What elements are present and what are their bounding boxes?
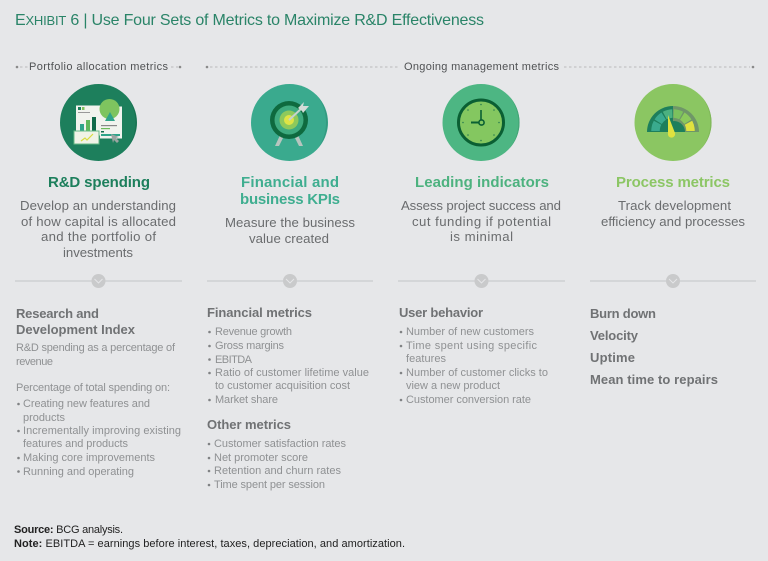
metrics: research and development index: revenue xyxy=(16,356,53,368)
description: R&D spending: investments xyxy=(63,245,133,260)
metrics: financial metrics: Gross margins xyxy=(215,340,284,352)
description: process metrics: efficiency and processes xyxy=(601,214,745,229)
metrics: user behavior xyxy=(399,305,548,406)
metrics: research and development index: Running and operating xyxy=(23,466,134,478)
metrics: other metrics xyxy=(207,417,346,491)
metrics: research and development index: products xyxy=(23,412,66,424)
column heading: R&D spending: R&D spending xyxy=(48,174,150,191)
metrics: user behavior: Customer conversion rate xyxy=(406,394,531,406)
metrics: financial metrics: to customer acquisition cost xyxy=(215,380,350,392)
icon: clock xyxy=(442,84,520,161)
section label: ongoing management metrics: Ongoing management metrics xyxy=(404,61,560,73)
metrics: process metrics list xyxy=(590,306,718,387)
column heading: financial and business KPIs: business KPIs xyxy=(240,191,340,208)
description: leading indicators: cut funding if potential xyxy=(412,214,551,229)
metrics: research and development index: Making core improvements xyxy=(23,452,156,464)
metrics: process metrics list: Uptime xyxy=(590,350,635,365)
metrics: other metrics: Other metrics xyxy=(207,417,291,432)
metrics: user behavior: view a new product xyxy=(406,380,500,392)
column heading: financial and business KPIs xyxy=(240,174,340,208)
metrics: financial metrics: Ratio of customer lifetime value xyxy=(215,367,369,379)
metrics: financial metrics xyxy=(207,305,369,406)
metrics: user behavior: Number of customer clicks to xyxy=(406,367,548,379)
source and note: Note: EBITDA = earnings before interest, taxes, depreciation, and amortization. xyxy=(14,538,405,550)
description: leading indicators: Assess project success and xyxy=(401,198,561,213)
title: EXHIBIT 6 | Use Four Sets of Metrics to Maximize R&D Effectiveness xyxy=(15,12,484,29)
description: process metrics: Track development xyxy=(618,198,731,213)
column heading: financial and business KPIs: Financial and xyxy=(241,174,339,191)
column heading: leading indicators: Leading indicators xyxy=(415,174,549,191)
metrics: financial metrics: Market share xyxy=(215,394,278,406)
description: R&D spending: of how capital is allocated xyxy=(21,214,176,229)
source and note: Source: BCG analysis. xyxy=(14,524,123,536)
metrics: user behavior: Time spent using specific xyxy=(406,340,538,352)
icon: target with arrow xyxy=(251,84,328,161)
source and note xyxy=(14,524,405,550)
divider with chevron: column 2 xyxy=(207,274,373,288)
description: leading indicators xyxy=(401,198,561,244)
metrics: other metrics: Net promoter score xyxy=(214,452,308,464)
metrics: process metrics list: Mean time to repairs xyxy=(590,372,718,387)
description: R&D spending: Develop an understanding xyxy=(20,198,176,213)
divider with chevron: column 1 xyxy=(15,274,182,288)
metrics: financial metrics: Financial metrics xyxy=(207,305,312,320)
section label: portfolio allocation metrics: Portfolio allocation metrics xyxy=(29,61,168,73)
metrics: user behavior: Number of new customers xyxy=(406,326,534,338)
metrics: research and development index: Creating new features and xyxy=(23,398,150,410)
divider with chevron: column 3 xyxy=(398,274,565,288)
description: leading indicators: is minimal xyxy=(450,229,513,244)
metrics: research and development index: Incrementally improving existing xyxy=(23,425,181,437)
metrics: research and development index: Percentage of total spending on: xyxy=(16,382,170,394)
divider with chevron: column 4 xyxy=(590,274,756,288)
metrics: user behavior: features xyxy=(406,353,446,365)
icon: speedometer gauge xyxy=(634,84,712,161)
icon: dashboard charts xyxy=(60,84,137,161)
description: financial and business KPIs: Measure the business xyxy=(225,215,355,230)
metrics: financial metrics: EBITDA xyxy=(215,354,253,366)
description: financial and business KPIs: value created xyxy=(249,231,329,246)
metrics: research and development index: Development Index xyxy=(16,322,136,337)
metrics: process metrics list: Velocity xyxy=(590,328,639,343)
description: process metrics xyxy=(601,198,745,229)
metrics: other metrics: Time spent per session xyxy=(214,479,325,491)
description: R&D spending: and the portfolio of xyxy=(41,229,156,244)
metrics: process metrics list: Burn down xyxy=(590,306,656,321)
metrics: research and development index: R&D spending as a percentage of xyxy=(16,342,176,354)
metrics: other metrics: Retention and churn rates xyxy=(214,465,342,477)
metrics: research and development index: features and products xyxy=(23,438,128,450)
description: financial and business KPIs xyxy=(225,215,355,246)
metrics: financial metrics: Revenue growth xyxy=(215,326,292,338)
metrics: other metrics: Customer satisfaction rates xyxy=(214,438,346,450)
metrics: research and development index xyxy=(16,306,181,478)
metrics: research and development index: Research and xyxy=(16,306,99,321)
description: R&D spending xyxy=(20,198,176,260)
column heading: process metrics: Process metrics xyxy=(616,174,730,191)
metrics: user behavior: User behavior xyxy=(399,305,483,320)
